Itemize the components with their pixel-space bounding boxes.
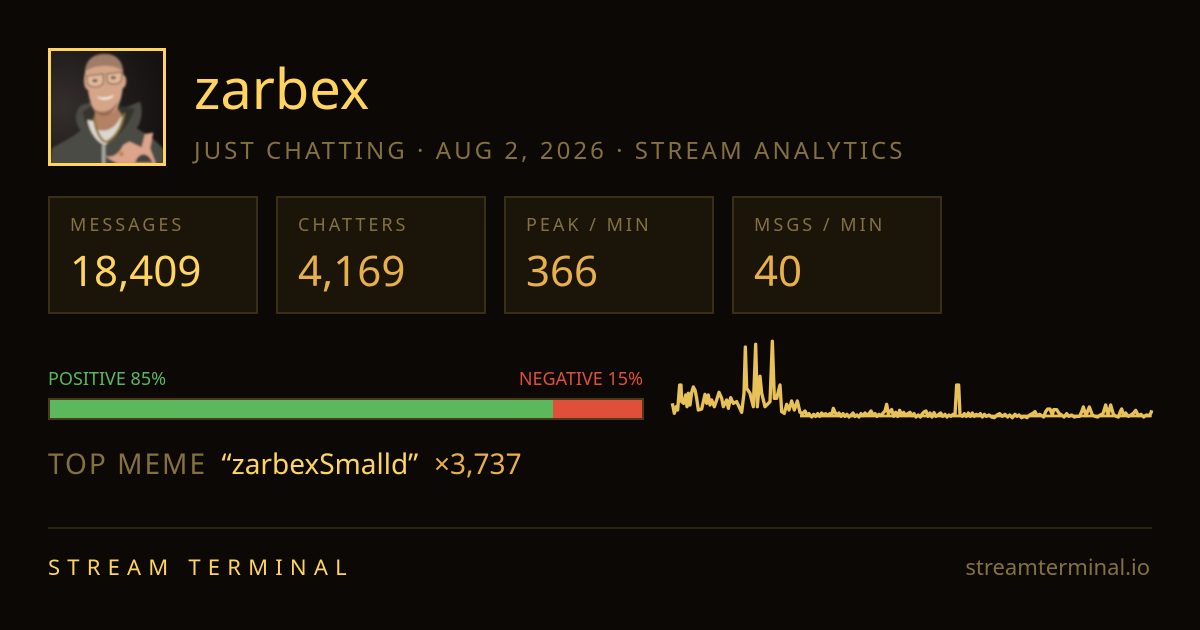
stat card: chatters: 4,169: [298, 242, 405, 299]
top meme label: TOP MEME: [48, 445, 207, 483]
subtitle: JUST CHATTING · AUG 2, 2026 · STREAM ANALYTICS: [194, 134, 905, 167]
stat card: messages: [48, 196, 258, 314]
sentiment bar: [48, 398, 644, 420]
avatar: [51, 51, 163, 163]
stat card: peak per minute: [504, 196, 714, 314]
footer divider: [48, 527, 1152, 529]
stat card: messages: 18,409: [70, 242, 201, 299]
streamer name: zarbex: [194, 50, 369, 126]
stat card: messages per minute: [732, 196, 942, 314]
stat card: peak per minute: PEAK / MIN: [526, 213, 652, 237]
stat card: chatters: CHATTERS: [298, 213, 408, 237]
stat card: messages per minute: 40: [754, 242, 802, 299]
top meme: [48, 445, 522, 483]
positive label: POSITIVE 85%: [48, 367, 166, 391]
avatar frame: [48, 48, 166, 166]
stat card: chatters: [276, 196, 486, 314]
top meme count: ×3,737: [434, 445, 522, 483]
activity sparkline: [670, 340, 1154, 420]
stat card: messages: MESSAGES: [70, 213, 184, 237]
stat card: messages per minute: MSGS / MIN: [754, 213, 885, 237]
negative label: NEGATIVE 15%: [519, 367, 643, 391]
top meme text: “zarbexSmalld”: [222, 445, 418, 483]
footer brand: STREAM TERMINAL: [48, 552, 354, 582]
footer url: streamterminal.io: [965, 552, 1150, 582]
stat card: peak per minute: 366: [526, 242, 598, 299]
